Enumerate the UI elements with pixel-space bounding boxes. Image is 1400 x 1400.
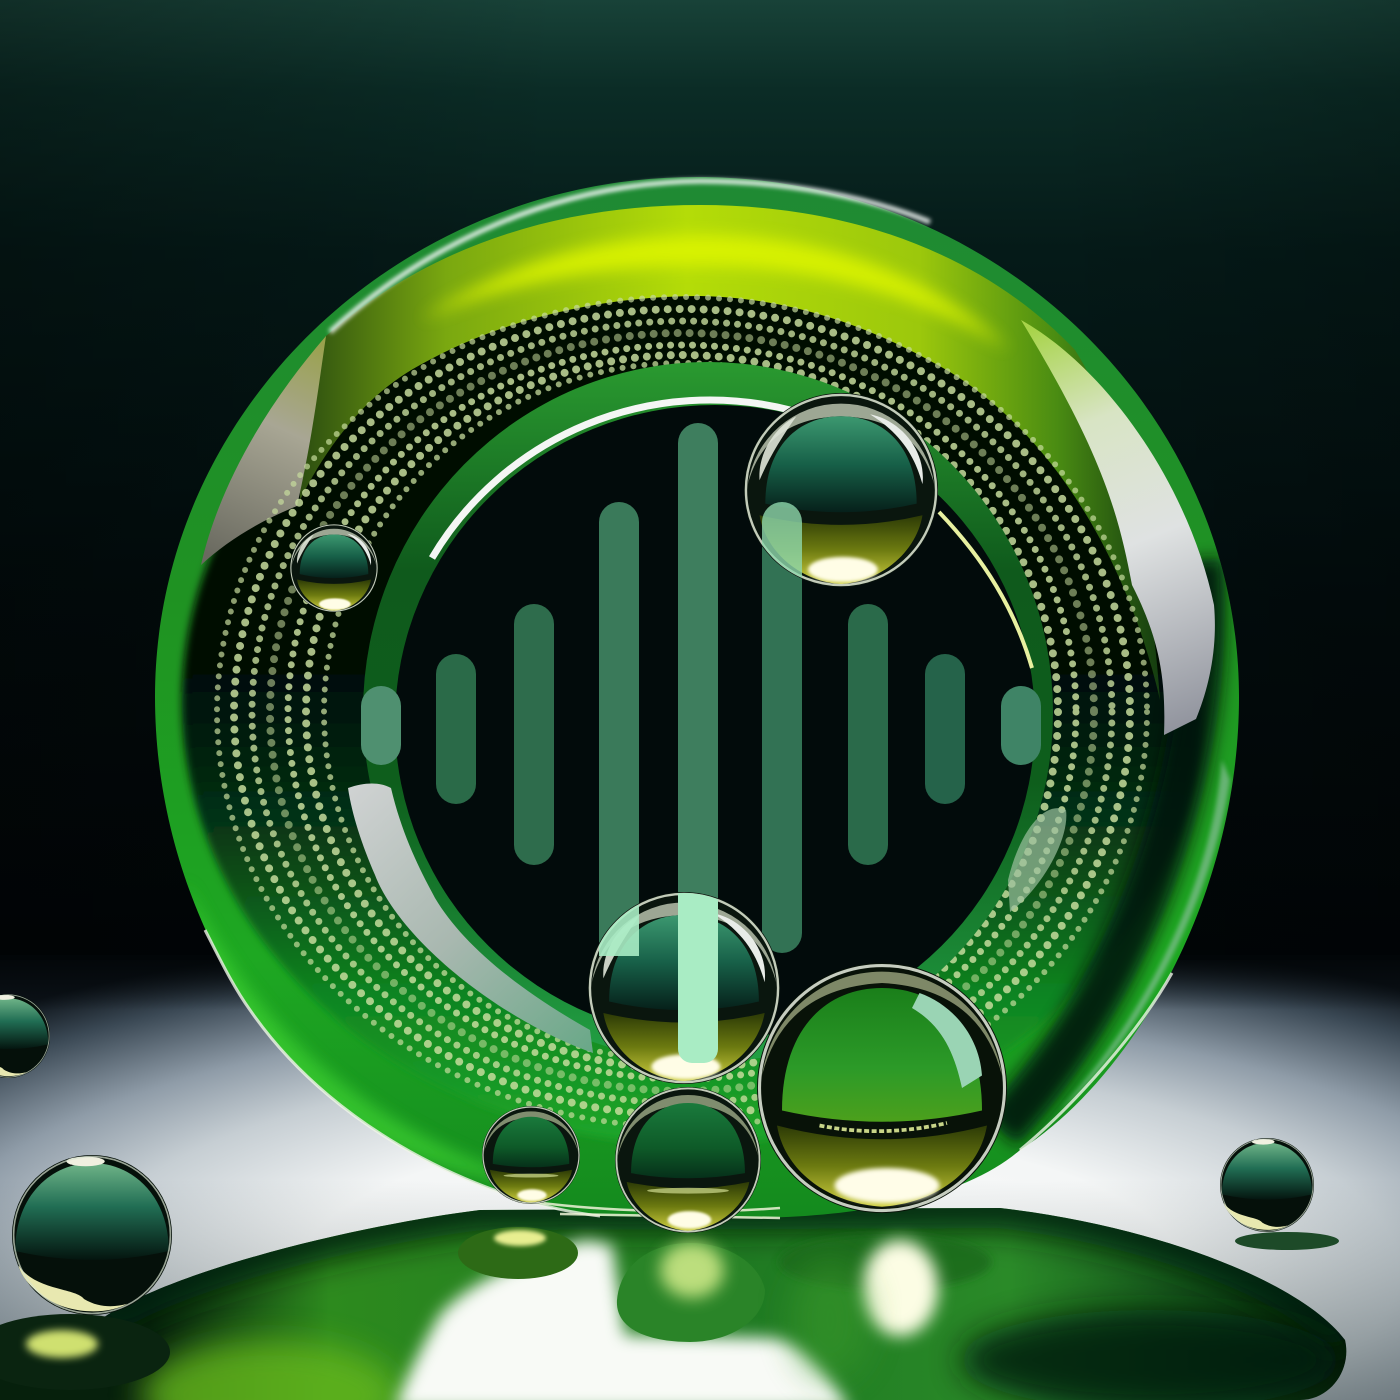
hole <box>395 405 1035 1039</box>
right glass highlight <box>1021 320 1215 735</box>
inner glass tube <box>363 362 1053 1062</box>
floor surface <box>0 955 1400 1400</box>
white light patch <box>395 1240 850 1400</box>
shadow of bottom centre droplet <box>617 1243 765 1342</box>
bar 5 <box>678 423 718 1063</box>
dotted band <box>217 297 1147 1127</box>
upper-left glass highlight <box>201 336 326 565</box>
droplet: upper right on ring <box>744 393 938 587</box>
top yellow-green band <box>300 205 1160 700</box>
bar 9 <box>1001 686 1041 765</box>
droplet: large lower right <box>757 963 1007 1213</box>
inner right yellow line <box>939 512 1032 668</box>
bar 3 <box>514 604 554 865</box>
lower-right white edge <box>1020 973 1172 1150</box>
bar 1 <box>361 686 401 765</box>
base edge lines <box>520 1200 780 1218</box>
bar highlight over upper droplet <box>762 502 802 578</box>
lower right dark shading <box>1000 560 1202 1130</box>
lower right rim sheen <box>1060 760 1230 1110</box>
lower-left white edge <box>205 930 600 1216</box>
inner band behind dots <box>182 205 1230 1190</box>
bar 8 <box>925 654 965 804</box>
bar 6 <box>762 502 802 953</box>
shadow of large droplet <box>780 1242 992 1286</box>
shadow of floor left droplet <box>0 1314 170 1390</box>
lower bright green glow <box>193 900 494 1187</box>
droplets <box>0 393 1314 1315</box>
droplet: floor right <box>1220 1138 1314 1232</box>
glass ring <box>155 177 1239 1218</box>
inner lower-left gray highlight <box>348 784 593 1053</box>
shadow of small bottom droplet <box>458 1227 578 1279</box>
droplet: small upper left <box>290 524 378 612</box>
ring body <box>155 177 1239 1218</box>
bar 7 <box>848 604 888 865</box>
inner top-left rim highlight <box>432 400 790 558</box>
droplet: lower centre <box>588 892 780 1084</box>
sound wave bars <box>361 423 1041 1063</box>
droplet: floor left <box>12 1155 172 1315</box>
droplet: far left edge <box>0 994 50 1078</box>
droplet: small bottom <box>482 1106 580 1204</box>
top white rim <box>330 181 930 332</box>
bar highlight over lower centre droplet <box>599 880 718 1063</box>
shadow of floor right droplet <box>1235 1232 1339 1250</box>
bar 2 <box>436 654 476 804</box>
inner right droplet reflection <box>1008 808 1066 912</box>
droplet: bottom centre <box>615 1087 761 1233</box>
ground shadow of ring <box>0 1200 1400 1400</box>
bar 4 <box>599 502 639 962</box>
